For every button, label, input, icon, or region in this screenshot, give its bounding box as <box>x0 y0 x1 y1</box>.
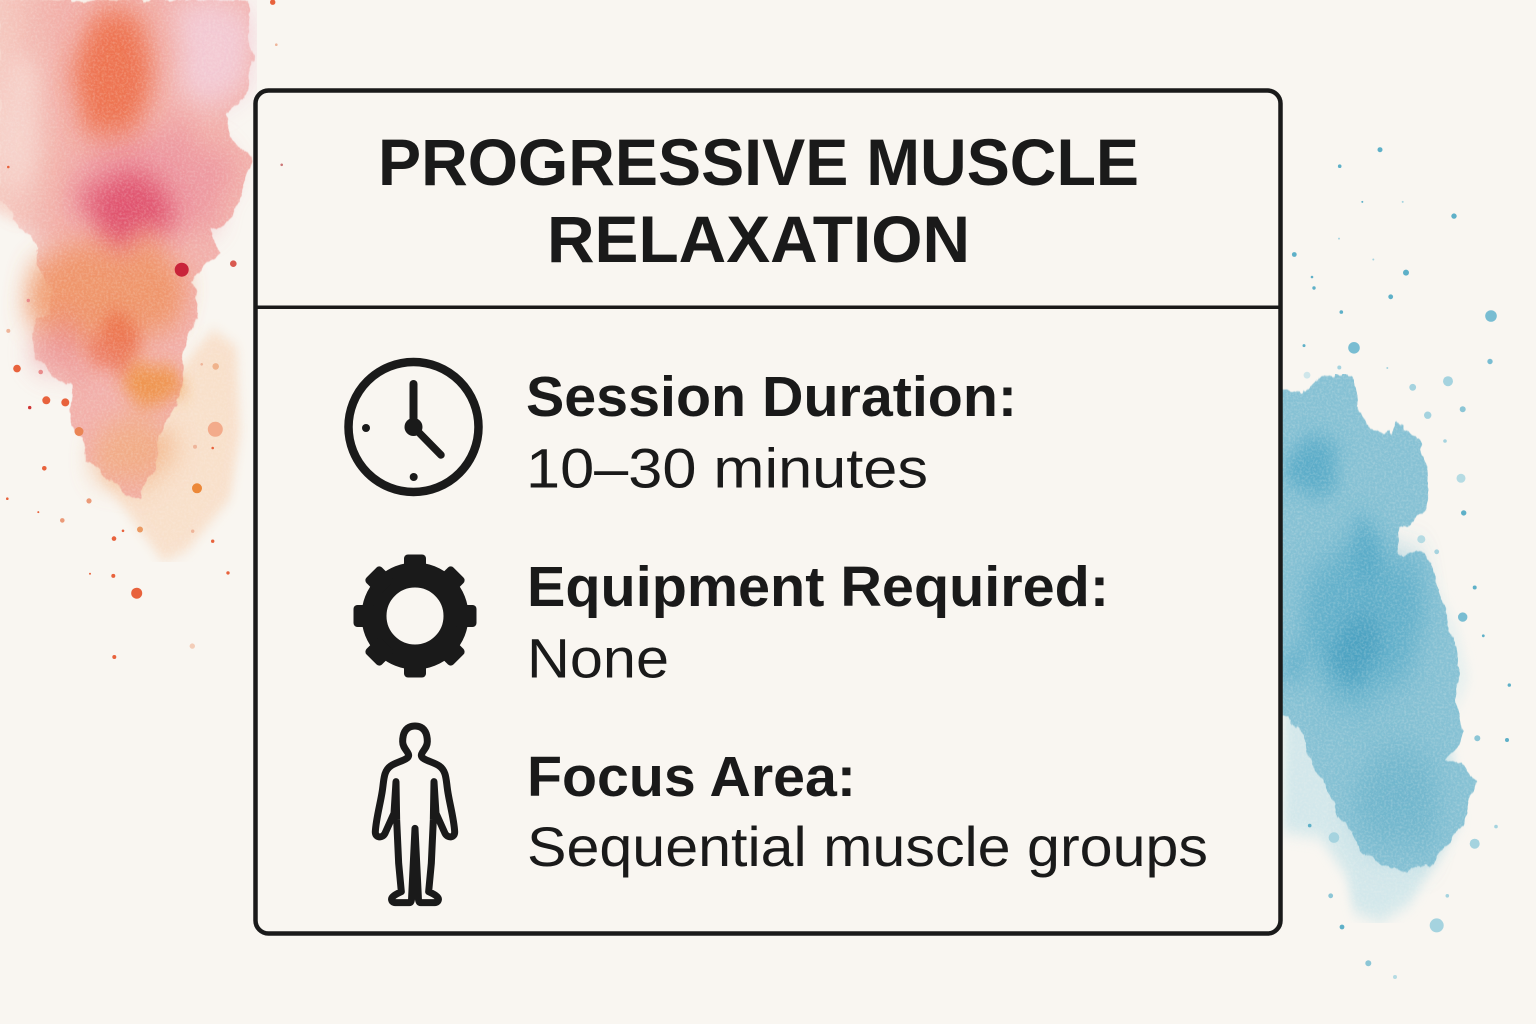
title <box>378 125 1139 276</box>
text block: session duration: Session Duration: <box>526 365 1017 429</box>
icon: clock <box>348 362 478 492</box>
text block: equipment required <box>527 555 1109 690</box>
paint splatter: red and orange droplets <box>6 0 278 659</box>
paint splatter: blue droplets <box>1292 147 1511 979</box>
title: RELAXATION <box>547 202 970 276</box>
header divider <box>255 306 1281 309</box>
icon: gear <box>354 554 476 678</box>
panel frame <box>256 90 1280 934</box>
watercolor splash: red and orange <box>0 0 257 562</box>
text block: focus area <box>527 745 1208 878</box>
title: PROGRESSIVE MUSCLE <box>378 125 1139 199</box>
text block: focus area: Sequential muscle groups <box>527 815 1208 878</box>
speck on panel <box>280 164 283 166</box>
panel: main card <box>255 90 1281 934</box>
icon: human body outline <box>375 726 455 903</box>
text block: equipment required: None <box>527 626 669 690</box>
text block: session duration <box>526 365 1017 500</box>
text block: equipment required: Equipment Required: <box>527 555 1109 619</box>
text block: focus area: Focus Area: <box>527 745 856 809</box>
text block: session duration: 10–30 minutes <box>526 436 928 500</box>
watercolor splash: blue <box>1270 374 1478 923</box>
